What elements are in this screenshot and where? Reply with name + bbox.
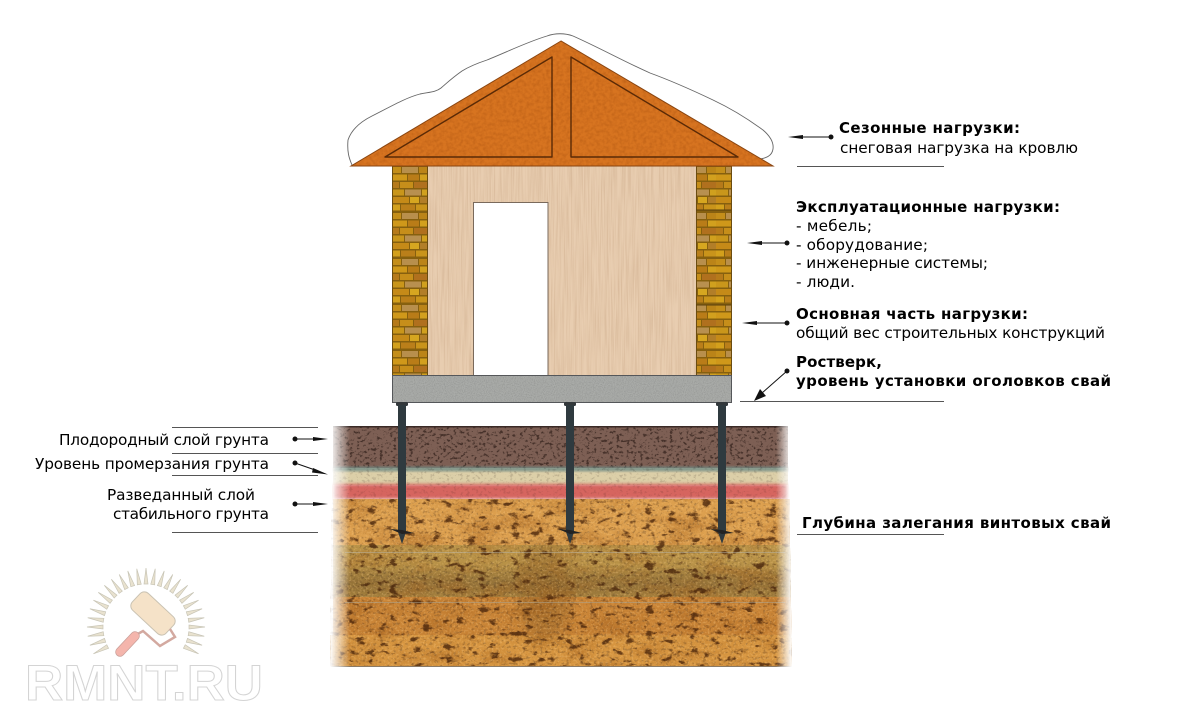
wall panel bbox=[428, 166, 696, 375]
callout: seasonal loads: Сезонные нагрузки: bbox=[839, 119, 1020, 137]
callout: operating loads: - мебель; bbox=[796, 217, 872, 235]
stable soil layer bbox=[330, 499, 792, 668]
callout: main load: Основная часть нагрузки: bbox=[796, 305, 1028, 323]
pile centre bbox=[558, 402, 582, 544]
icon: sun rays bbox=[87, 568, 205, 656]
snow on the roof bbox=[348, 34, 773, 166]
logo wordmark: RMNT.RU bbox=[25, 655, 263, 711]
right brick pier bbox=[696, 166, 732, 376]
callout: main load: общий вес строительных конструкций bbox=[796, 324, 1105, 342]
label: stable soil bbox=[107, 486, 328, 532]
callout: grillage: Ростверк, bbox=[796, 353, 882, 371]
callout: operating loads: Эксплуатационные нагрузки: bbox=[796, 198, 1060, 216]
callout: pile depth: Глубина залегания винтовых свай bbox=[802, 514, 1111, 532]
screw piles bbox=[390, 402, 734, 544]
callout: operating loads: - инженерные системы; bbox=[796, 254, 988, 272]
fertile soil layer bbox=[333, 426, 788, 468]
pile left bbox=[390, 402, 414, 544]
callout: main load bbox=[742, 305, 1105, 342]
callout: operating loads: - оборудование; bbox=[796, 236, 928, 254]
left brick pier bbox=[392, 166, 428, 376]
callout: grillage bbox=[740, 353, 1111, 402]
soil cross-section bbox=[330, 424, 792, 669]
pile right bbox=[710, 402, 734, 544]
callout: seasonal loads: снеговая нагрузка на кровлю bbox=[840, 139, 1078, 157]
freezing layer bbox=[333, 467, 788, 485]
red layer bbox=[333, 484, 788, 499]
soft soil edges bbox=[330, 424, 792, 669]
callout: seasonal loads bbox=[788, 119, 1078, 166]
roof gable bbox=[351, 41, 773, 166]
callout: operating loads: - люди. bbox=[796, 273, 855, 291]
label: stable soil: стабильного грунта bbox=[113, 505, 269, 523]
label: fertile soil bbox=[59, 428, 328, 454]
callout: operating loads bbox=[747, 198, 1060, 291]
label: fertile soil: Плодородный слой грунта bbox=[59, 431, 269, 449]
label: stable soil: Разведанный слой bbox=[107, 486, 255, 504]
grillage bbox=[392, 376, 732, 402]
door opening bbox=[474, 202, 548, 376]
label: freezing level: Уровень промерзания грунта bbox=[35, 455, 269, 473]
callout: grillage: уровень установки оголовков свай bbox=[796, 372, 1111, 390]
house bbox=[348, 34, 773, 402]
icon: paint roller bbox=[120, 589, 178, 652]
logo: RMNT.RU watermark bbox=[25, 568, 263, 711]
